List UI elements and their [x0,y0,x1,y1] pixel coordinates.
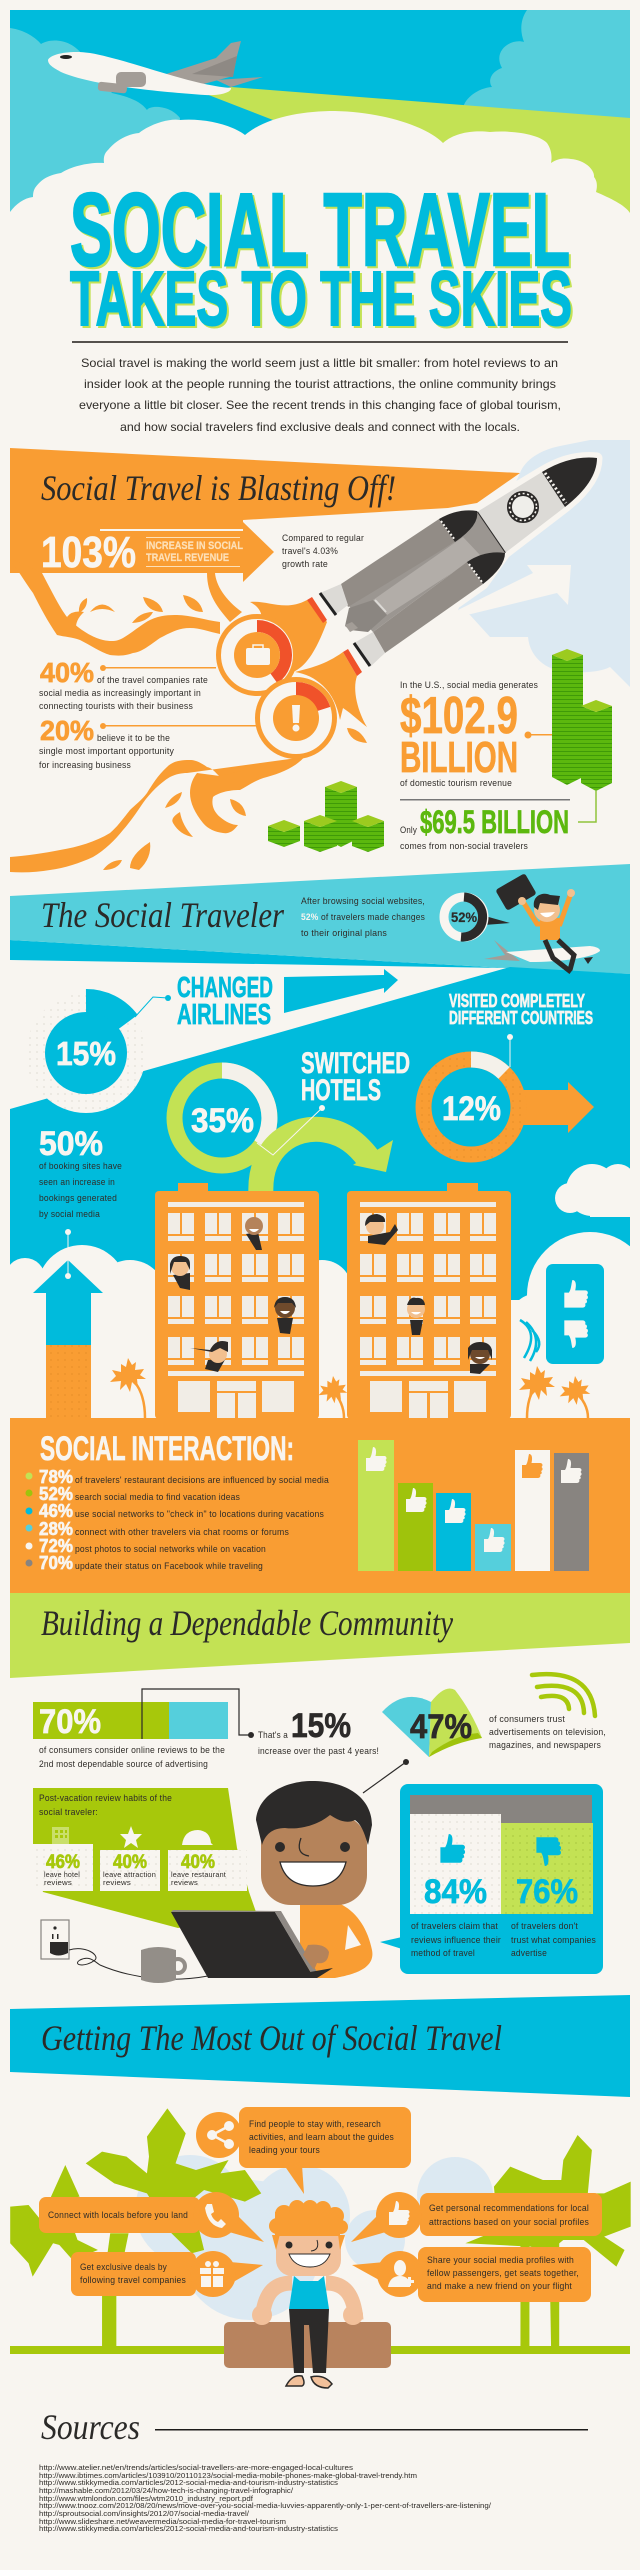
hair [256,1781,372,1845]
stat: 102.9 billion: In the U.S., social media generates [400,680,538,691]
icon: gift [200,2261,224,2287]
airplane [48,41,263,95]
heading: social traveler: The Social Traveler [41,895,285,935]
card: attraction reviews [100,1850,160,1891]
legs [289,2309,329,2373]
list: statistics: search social media to find vacation ideas [75,1492,240,1503]
changes note: 52% of travelers made changes [301,912,425,923]
intro paragraph: and how social travelers find exclusive deals and connect with the locals. [120,420,520,434]
icon: broadcast arcs [532,1674,595,1716]
connector: head to book [363,1759,409,1793]
stat: 47% trust ads: 47% [410,1708,472,1746]
stat: 15% increase: increase over the past 4 years! [258,1746,379,1757]
stat: 50% booking sites: of booking sites have [39,1161,122,1172]
speech bubble: exclusive deals: following travel companies [80,2275,186,2286]
speech bubble: find people: Find people to stay with, research [249,2119,381,2130]
head [276,2228,341,2276]
nozzle top [320,584,348,615]
suitcase [224,2322,391,2368]
circle: changed airlines 15% [26,993,171,1113]
stat: 40%: of the travel companies rate [97,675,208,686]
sandals [286,2376,332,2388]
stat: 47% trust ads: advertisements on television, [489,1727,606,1738]
source links: http://www.ibtimes.com/articles/103910/20110123/social-media-mobile-phones-make-global-travel-trendy.htm [39,2471,417,2480]
stat: 20%: single most important opportunity [39,746,174,757]
panel: review habits: social traveler: [39,1807,98,1818]
changes note: After browsing social websites, [301,896,425,907]
source links: http://mashable.com/2012/03/24/how-tech-is-changing-travel-infographic/ [39,2486,294,2495]
stat: 20%: believe it to be the [97,733,170,744]
changes note: to their original plans [301,928,387,939]
thumb up [440,1834,465,1863]
donut: 52%: 52% [451,909,478,925]
smile [280,1862,346,1886]
background clouds [135,2155,493,2320]
character with suitcase [224,2200,391,2388]
right cloud [463,10,630,120]
panel: trust: 76% [516,1873,578,1911]
vine left [10,558,220,656]
center engine [345,600,387,632]
source links: http://www.atelier.net/en/trends/articles/social-travellers-are-more-engaged-local-cultures [39,2463,353,2472]
intro paragraph: insider look at the people running the tourist attractions, the online community brings [84,377,556,391]
stat: 50% booking sites: 50% [39,1125,103,1163]
list: statistics: post photos to social networks while on vacation [75,1544,266,1555]
stat: 102.9 billion: $102.9 [400,687,518,745]
bar chart: thumbs [358,1440,589,1571]
compared note [282,533,364,570]
stat: 47% trust ads: of consumers trust [489,1714,565,1725]
icon: phone [205,2204,226,2228]
window [510,494,536,520]
panel: trust: 84% [424,1873,487,1911]
list: statistics: update their status on Facebook while traveling [75,1561,263,1572]
eyes [275,1842,285,1852]
intro paragraph: everyone a little bit closer. See the recent trends in this changing face of global tourism, [79,398,561,412]
stat: 69.5 billion: comes from non-social travelers [400,841,528,852]
arrow: airlines [284,969,398,1013]
green band: community [10,1593,630,1678]
stat: 69.5 billion [400,791,596,852]
card: restaurant reviews: 40% [181,1852,215,1873]
panel: review habits [33,1788,256,1928]
changes note [301,896,425,939]
stat: 102.9 billion [400,680,570,800]
ring: 40 percent [218,616,296,694]
source links: http://www.stikkymedia.com/articles/2012-social-media-and-tourism-industry-statistics [39,2524,338,2533]
icon: food dish [182,1830,213,1845]
stat: 50% booking sites: by social media [39,1209,100,1220]
icon: building [52,1827,69,1844]
icon: exclamation [292,705,300,732]
stat: 15% increase [258,1707,379,1757]
booster caps [439,510,477,542]
card: restaurant reviews: leave restaurant [171,1870,227,1879]
list: statistics: 46% [39,1501,73,1521]
money stacks right [552,649,612,791]
stat: 15% increase: 15% [291,1707,351,1745]
head [534,898,560,922]
left cloud [10,28,180,215]
list: statistics: 72% [39,1536,73,1556]
circle: changed airlines 15%: 15% [56,1035,116,1072]
stat: 20% [39,715,257,771]
stat: 50% booking sites: bookings generated [39,1193,117,1204]
stat: 103%: TRAVEL REVENUE [146,552,229,564]
character with laptop [171,1781,372,1978]
torso [300,1898,372,1978]
card: attraction reviews: reviews [103,1878,131,1887]
speech bubble: share profiles: and make a new friend on your flight [427,2281,572,2292]
panel: trust: of travelers claim that [411,1921,498,1932]
teal band [10,864,630,974]
stat: 70% bar: of consumers consider online reviews to be the [39,1745,225,1756]
label: changed airlines: CHANGED [177,972,273,1004]
list: statistics: connect with other travelers via chat rooms or forums [75,1527,289,1538]
panel: trust [380,1784,603,1974]
blue band: most out [10,1995,630,2097]
icon: briefcase [246,645,270,665]
panel: social interaction: SOCIAL INTERACTION: [40,1430,294,1468]
arms [262,2283,356,2320]
blue social traveler field [10,967,630,1300]
card: hotel reviews: leave hotel [44,1870,80,1879]
panel: review habits: Post-vacation review habits of the [39,1793,172,1804]
big foreground cloud [10,111,630,240]
stat: 102.9 billion: BILLION [400,733,518,782]
arrow: switched hotels [257,1105,393,1195]
source links [39,2463,492,2533]
leaves [79,598,87,613]
stat: 102.9 billion: of domestic tourism revenue [400,778,512,789]
vine bottom [10,758,297,872]
speech bubble: find people [196,2107,411,2194]
source links: http://www.wtmlondon.com/files/wtm2010_industry_report.pdf [39,2494,254,2503]
like and dislike panel [520,1264,604,1364]
speech bubble: exclusive deals: Get exclusive deals by [80,2262,167,2273]
face [261,1815,367,1905]
orange banner and revenue arrow [10,448,520,872]
stat: 47% trust ads: magazines, and newspapers [489,1740,601,1751]
label: different countries [449,991,593,1028]
smile [289,2254,330,2267]
icon: thumb [389,2201,410,2225]
speech bubble: recommendations: attractions based on your social profiles [429,2217,589,2228]
hotel right [347,1183,511,1419]
stat: 103%: INCREASE IN SOCIAL [146,540,243,552]
icon: coffee mug [141,1947,185,1983]
card: attraction reviews: 40% [113,1852,147,1873]
stat: 50% booking sites: seen an increase in [39,1177,115,1188]
header sky panel [10,10,630,240]
thumb down [536,1837,561,1866]
ground line [10,2346,630,2354]
compared note: Compared to regular [282,533,364,544]
stat: 103%: 103% [41,528,136,577]
icon: star [120,1826,142,1848]
hair [269,2200,348,2250]
donut: 52% [444,897,510,937]
compared note: travel's 4.03% [282,546,338,557]
rocket [250,458,597,727]
panel: trust: method of travel [411,1948,475,1959]
small plane [484,940,520,961]
green beam [206,87,630,215]
nozzle bottom [354,632,385,667]
card: restaurant reviews: reviews [171,1878,198,1887]
card: restaurant reviews [168,1850,247,1891]
compared note: growth rate [282,559,328,570]
stat: 40%: social media as increasingly important in [39,688,201,699]
stat: 69.5 billion: Only [400,825,417,836]
label: changed airlines: AIRLINES [177,999,271,1031]
legs [545,940,574,972]
icon: book [382,1688,482,1757]
panel: trust: of travelers don't [511,1921,578,1932]
list: statistics [26,1467,329,1573]
list: statistics: of travelers' restaurant decisions are influenced by social media [75,1475,329,1486]
panel: trust: advertise [511,1948,547,1959]
list: statistics: 70% [39,1553,73,1573]
background cloud behind rocket [458,440,630,687]
guests [366,1217,384,1235]
stat: 47% trust ads [410,1708,606,1751]
speech bubble: connect with locals: Connect with locals before you land [48,2210,188,2221]
stat: 70% bar: 2nd most dependable source of advertising [39,1759,208,1770]
heading: community: Building a Dependable Community [41,1603,453,1643]
list: statistics: use social networks to "check in" to locations during vacations [75,1509,324,1520]
label: switched hotels: HOTELS [301,1074,381,1107]
stat: 69.5 billion: $69.5 BILLION [420,804,569,840]
label: changed airlines [177,972,273,1031]
money stacks left [268,781,384,852]
panel: social interaction [10,1418,630,1593]
source links: http://sproutsocial.com/insights/2012/07/social-media-travel/ [39,2509,250,2518]
panel: trust: reviews influence their [411,1935,501,1946]
heading: sources: Sources [41,2407,140,2447]
list: statistics: 78% [39,1467,73,1487]
ring: hotels 35%: 35% [191,1102,254,1140]
palm trees [110,1358,590,1418]
card: hotel reviews: reviews [44,1878,72,1887]
grey fuselage [348,512,505,632]
speech bubble: exclusive deals [71,2251,263,2297]
stat: 40%: 40% [40,657,94,688]
intro paragraph [72,341,568,434]
hotel left [155,1183,319,1419]
speech bubble: find people: leading your tours [249,2145,320,2156]
flames [250,600,327,672]
list: statistics: 52% [39,1484,73,1504]
title [70,172,574,344]
stat: 15% increase: That's a [258,1730,288,1741]
list: statistics: 28% [39,1519,73,1539]
ground clouds [5,1164,640,1425]
source links: http://www.tnooz.com/2012/08/20/news/move-over-you-social-media-luvvies-apparently-only-1-per-cent-of-travellers-are-listening/ [39,2501,492,2510]
up arrow: bookings [33,1229,103,1418]
body [477,472,565,553]
ring: countries 12%: 12% [442,1090,501,1128]
stat: 40%: connecting tourists with their business [39,701,193,712]
speech bubble: find people: activities, and learn about the guides [249,2132,394,2143]
ring: 20 percent [258,680,334,756]
label: different countries: VISITED COMPLETELY [449,991,585,1011]
stat: 20%: for increasing business [39,760,131,771]
ring: hotels 35% [174,1070,270,1166]
suitcase [495,873,537,911]
stat: 103% [41,528,243,577]
icon: outlet and cord [41,1920,208,1979]
speech bubble: share profiles [352,2247,591,2302]
stat: 20%: 20% [40,715,94,746]
card: attraction reviews: leave attraction [103,1870,156,1879]
speech bubble: recommendations: Get personal recommendations for local [429,2203,589,2214]
intro paragraph: Social travel is making the world seem just a little bit smaller: from hotel reviews to an [81,356,558,370]
source links: http://www.slideshare.net/weavermedia/social-media-for-travel-tourism [39,2517,286,2526]
card: hotel reviews [33,1844,93,1891]
heading: blasting off: Social Travel is Blasting Off! [41,468,396,508]
icon: share [208,2122,234,2148]
stat: 70% bar [33,1689,254,1770]
stat: 40% [39,657,216,712]
speech bubble: recommendations [351,2192,602,2242]
stat: 70% bar: 70% [39,1703,101,1741]
heading: most out: Getting The Most Out of Social Travel [41,2018,502,2058]
label: switched hotels [301,1047,410,1107]
panel: trust: trust what companies [511,1935,596,1946]
palm trees: lime [10,2108,631,2348]
speech bubble: share profiles: fellow passengers, get seats together, [427,2268,579,2279]
nose cone [542,458,597,507]
tank top [289,2276,329,2309]
ring: countries 12% [424,1034,594,1154]
label: switched hotels: SWITCHED [301,1047,410,1080]
speech bubble: connect with locals [39,2192,264,2242]
icon: add friend [388,2260,414,2287]
guests [246,1232,262,1250]
card: hotel reviews: 46% [46,1852,80,1873]
arms and shirt [522,893,571,924]
speech bubble: share profiles: Share your social media profiles with [427,2255,574,2266]
traveler on plane [484,873,600,972]
stat: 50% booking sites [39,1125,122,1220]
silhouette outline [307,458,597,676]
laptop [171,1912,314,1978]
source links: http://www.stikkymedia.com/articles/2012-social-media-and-tourism-industry-statistics [39,2478,338,2487]
